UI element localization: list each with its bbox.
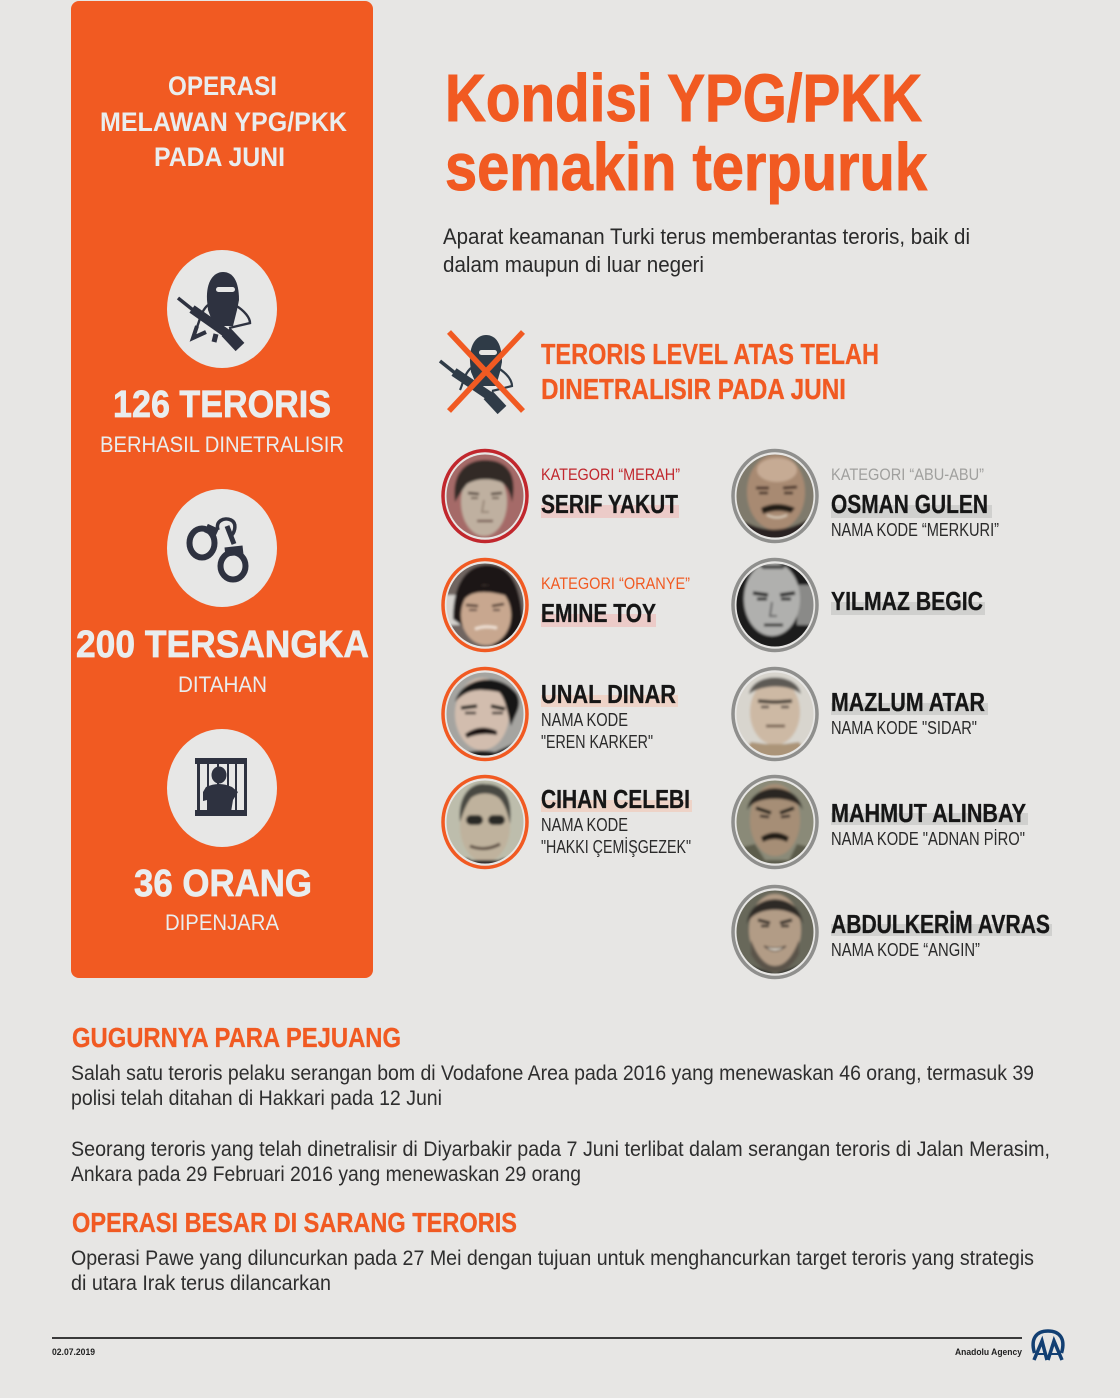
panel heading: PADA JUNI xyxy=(154,142,285,172)
text block: Pawe operation xyxy=(71,1247,1034,1295)
stat: 200 suspects: 200 TERSANGKA xyxy=(76,624,369,666)
text block: Vodafone Area attack: Salah satu teroris pelaku serangan bom di Vodafone Area pada 2016 yang menewaskan 46 orang, termasuk 39 xyxy=(71,1062,1034,1085)
label: Yilmaz Begic: YILMAZ BEGIC xyxy=(831,586,983,616)
text block: Pawe operation: Operasi Pawe yang diluncurkan pada 27 Mei dengan tujuan untuk menghancurkan target teroris yang strategis xyxy=(71,1247,1034,1270)
icon: person behind bars xyxy=(167,729,277,847)
heading: fallen fighters: GUGURNYA PARA PEJUANG xyxy=(72,1022,401,1053)
icon: AA logo xyxy=(1033,1331,1063,1360)
subtitle xyxy=(443,224,970,277)
label: Emine Toy: EMINE TOY xyxy=(541,598,656,628)
icon: armed militant xyxy=(167,250,277,368)
footer xyxy=(52,1331,1063,1360)
label: Osman Gulen xyxy=(831,465,999,540)
stat: 36 jailed: 36 ORANG xyxy=(134,863,312,905)
stat: 126 terrorists: 126 TERORIS xyxy=(113,384,331,426)
label: Abdulkerim Avras xyxy=(831,909,1052,960)
label: Osman Gulen: KATEGORI “ABU-ABU” xyxy=(831,465,984,484)
text block: Pawe operation: di utara Irak terus dilancarkan xyxy=(71,1272,331,1295)
panel: June operations xyxy=(71,1,373,978)
stat: 126 terrorists: BERHASIL DINETRALISIR xyxy=(100,432,344,457)
section heading: top-level terrorists xyxy=(541,339,879,406)
portrait: Osman Gulen xyxy=(730,450,820,542)
panel heading: MELAWAN YPG/PKK xyxy=(100,107,347,137)
portrait: Mazlum Atar xyxy=(730,668,820,760)
subtitle: dalam maupun di luar negeri xyxy=(443,252,704,277)
text block: Vodafone Area attack: polisi telah ditahan di Hakkari pada 12 Juni xyxy=(71,1087,442,1110)
label: Mahmut Alinbay: MAHMUT ALINBAY xyxy=(831,798,1026,828)
label: Mazlum Atar: MAZLUM ATAR xyxy=(831,687,985,717)
portrait: Abdulkerim Avras xyxy=(730,886,820,978)
label: Abdulkerim Avras: ABDULKERİM AVRAS xyxy=(831,909,1050,939)
label: Mazlum Atar: NAMA KODE "SIDAR" xyxy=(831,718,977,738)
subtitle: Aparat keamanan Turki terus memberantas teroris, baik di xyxy=(443,224,970,249)
panel heading xyxy=(100,71,347,172)
date: 02.07.2019 xyxy=(52,1347,95,1358)
panel heading: OPERASI xyxy=(168,71,277,101)
portrait: Cihan Celebi xyxy=(440,776,530,868)
stat: 126 terrorists xyxy=(100,384,344,457)
label: Serif Yakut xyxy=(541,465,680,519)
section heading: top-level terrorists: DINETRALISIR PADA JUNI xyxy=(541,374,846,406)
label: Mahmut Alinbay: NAMA KODE "ADNAN PİRO" xyxy=(831,829,1025,849)
text block: Vodafone Area attack xyxy=(71,1062,1034,1110)
stat: 36 jailed: DIPENJARA xyxy=(165,910,279,935)
label: Mahmut Alinbay xyxy=(831,798,1028,849)
label: Abdulkerim Avras: NAMA KODE “ANGIN” xyxy=(831,940,980,960)
label: Serif Yakut: KATEGORI “MERAH” xyxy=(541,465,680,484)
label: Osman Gulen: NAMA KODE “MERKURI” xyxy=(831,520,999,540)
label: Unal Dinar: NAMA KODE xyxy=(541,710,628,730)
label: Serif Yakut: SERIF YAKUT xyxy=(541,489,678,519)
label: Mazlum Atar xyxy=(831,687,988,738)
portrait: Yilmaz Begic xyxy=(730,560,820,650)
label: Emine Toy: KATEGORI “ORANYE” xyxy=(541,574,690,593)
stat: 200 suspects: DITAHAN xyxy=(178,672,267,697)
heading: major operation: OPERASI BESAR DI SARANG TERORIS xyxy=(72,1207,517,1238)
text block: Merasim street attack: Ankara pada 29 Februari 2016 yang menewaskan 29 orang xyxy=(71,1163,581,1186)
label: Osman Gulen: OSMAN GULEN xyxy=(831,489,988,519)
title: Kondisi YPG/PKK xyxy=(445,61,922,136)
label: Cihan Celebi xyxy=(541,784,692,857)
icon: militant crossed out xyxy=(440,332,523,411)
title: semakin terpuruk xyxy=(445,130,928,205)
label: Emine Toy xyxy=(541,574,690,628)
label: Unal Dinar: "EREN KARKER" xyxy=(541,732,653,752)
agency name: Anadolu Agency xyxy=(955,1347,1023,1358)
stat: 36 jailed xyxy=(134,863,312,935)
label: Cihan Celebi: NAMA KODE xyxy=(541,815,628,835)
portrait: Emine Toy xyxy=(440,560,530,650)
title xyxy=(445,61,928,205)
label: Cihan Celebi: "HAKKI ÇEMİŞGEZEK" xyxy=(541,837,691,857)
portrait: Serif Yakut xyxy=(440,450,530,542)
stat: 200 suspects xyxy=(76,624,369,697)
portrait: Mahmut Alinbay xyxy=(730,776,820,868)
portrait: Unal Dinar xyxy=(440,668,530,760)
text block: Merasim street attack: Seorang teroris yang telah dinetralisir di Diyarbakir pada 7 Juni terlibat dalam serangan teroris di Jalan Merasim, xyxy=(71,1138,1050,1161)
label: Cihan Celebi: CIHAN CELEBI xyxy=(541,784,690,814)
label: Unal Dinar xyxy=(541,679,678,752)
text block: Merasim street attack xyxy=(71,1138,1050,1186)
label: Unal Dinar: UNAL DINAR xyxy=(541,679,676,709)
icon: handcuffs xyxy=(167,489,277,607)
section heading: top-level terrorists: TERORIS LEVEL ATAS TELAH xyxy=(541,339,879,371)
